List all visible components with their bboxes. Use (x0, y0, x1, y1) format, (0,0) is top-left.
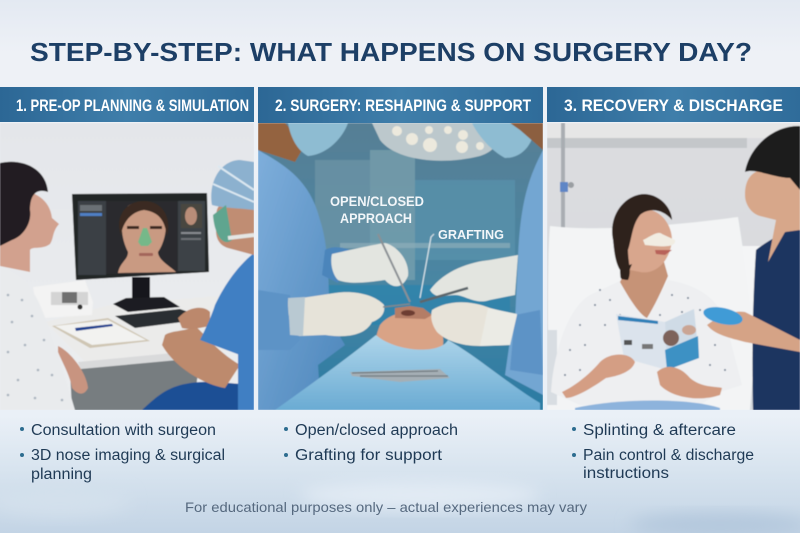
heading: step 2: 2. SURGERY: RESHAPING & SUPPORT (275, 97, 531, 115)
drape and patient face (275, 306, 540, 410)
text block: step 2 bullets: Grafting for support (295, 447, 443, 464)
text block: step 3 bullets: instructions (583, 465, 669, 482)
panel: recovery photo (547, 123, 800, 410)
panel: pre-op planning photo (0, 123, 254, 410)
text block: step 2 bullets: Open/closed approach (295, 422, 458, 439)
text block: step 3 bullets (572, 422, 754, 482)
blanket (575, 400, 720, 410)
title: STEP-BY-STEP: WHAT HAPPENS ON SURGERY DAY? (30, 37, 752, 67)
text block: step 2 bullets (284, 422, 458, 464)
iv pole (560, 123, 574, 233)
callout: grafting: GRAFTING (438, 227, 504, 242)
right surgeon (472, 123, 543, 395)
text block: step 1 bullets: planning (31, 466, 92, 483)
text block: step 3 bullets: Pain control & discharge (583, 447, 754, 464)
callout: open/closed approach: APPROACH (340, 211, 412, 226)
monitor (72, 193, 209, 280)
text block: step 1 bullets: Consultation with surgeon (31, 422, 216, 439)
callout: open/closed approach: OPEN/CLOSED (330, 194, 424, 209)
leaflet (616, 309, 699, 370)
desk (70, 353, 198, 410)
surgeon (142, 160, 254, 410)
footer disclaimer: For educational purposes only – actual experiences may vary (185, 499, 587, 515)
monitor stand (113, 277, 180, 312)
panel: surgery photo (258, 123, 543, 410)
heading: step 3 (547, 87, 800, 122)
heading: step 1 (0, 87, 254, 122)
heading: step 2 (258, 87, 543, 123)
left surgeon (258, 123, 350, 410)
patient hands (562, 354, 722, 398)
heading: step 1: 1. PRE-OP PLANNING & SIMULATION (16, 97, 249, 115)
surgical light (372, 123, 498, 161)
text block: step 1 bullets: 3D nose imaging & surgical (31, 447, 225, 464)
nurse (745, 126, 800, 410)
left surgeon gloves (288, 243, 408, 336)
callout: open/closed approach (330, 196, 424, 223)
text block: step 3 bullets: Splinting & aftercare (583, 422, 736, 439)
keyboard (115, 309, 200, 328)
right surgeon gloves (430, 255, 518, 346)
text block: step 1 bullets (20, 422, 225, 483)
bed and pillow (547, 217, 761, 410)
patient (0, 162, 88, 410)
instruments and pointer lines (378, 234, 468, 307)
patient (551, 194, 727, 394)
spirometer and nurse hand (702, 304, 800, 352)
notepad and pen (52, 318, 150, 348)
device (33, 280, 93, 318)
heading: step 3: 3. RECOVERY & DISCHARGE (564, 97, 783, 115)
